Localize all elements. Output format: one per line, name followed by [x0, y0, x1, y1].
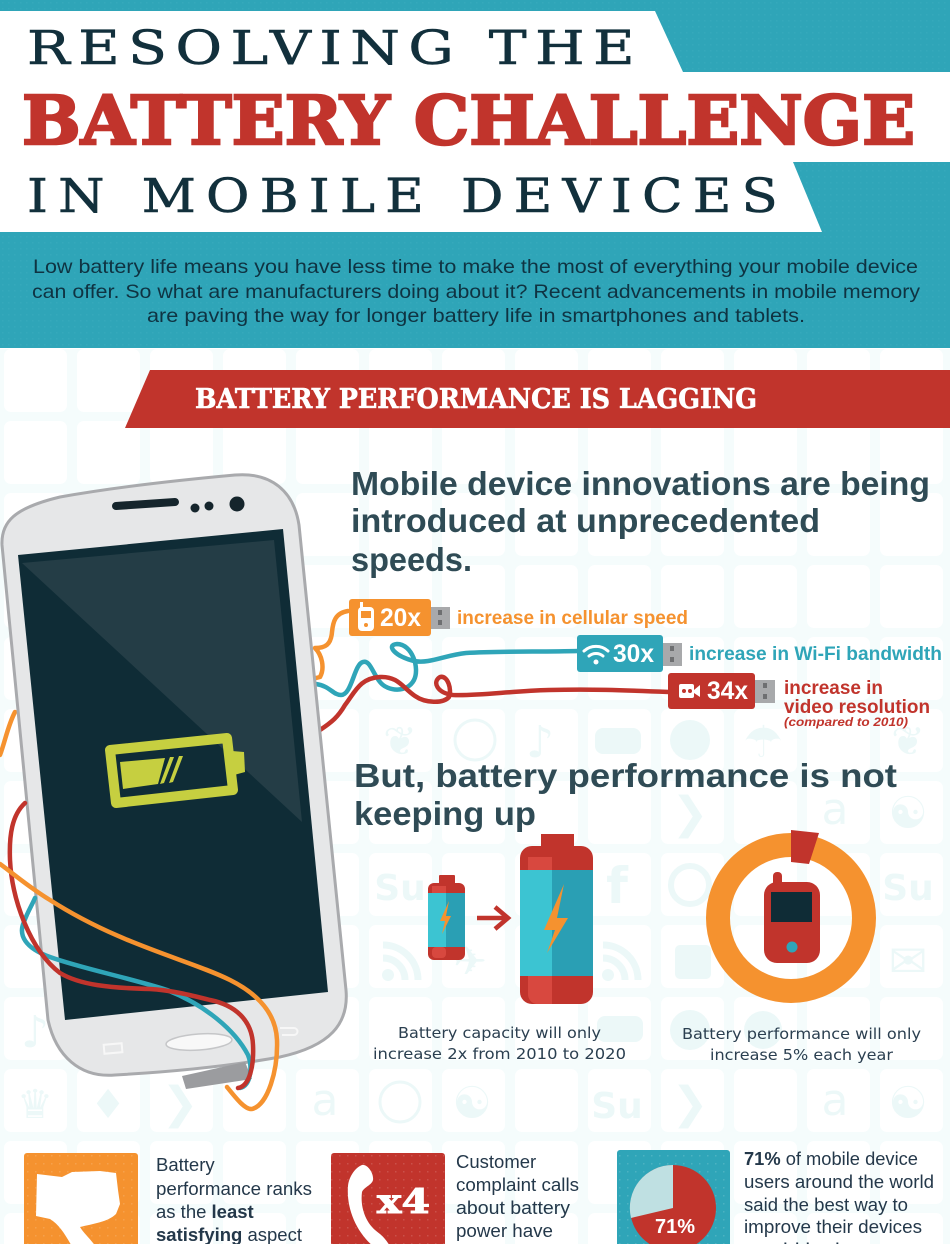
phone connector [182, 1062, 252, 1089]
infographic canvas: ❦ [383, 719, 417, 765]
headline: innovations: speeds. [351, 541, 472, 578]
text: users around the world [744, 1171, 934, 1192]
infographic canvas: ❯ [672, 788, 708, 839]
caption: capacity: increase 2x from 2010 to 2020 [373, 1045, 626, 1063]
text: power have [456, 1220, 553, 1241]
infographic canvas: ☯ [888, 788, 928, 839]
infographic canvas: f [606, 857, 629, 915]
infographic canvas: ♛ [17, 1082, 53, 1128]
headline: innovations: introduced at unprecedented [351, 502, 820, 539]
infographic canvas: ✈ [453, 939, 487, 985]
title line: battery challenge: BATTERY CHALLENGE [22, 81, 915, 160]
text: complaint calls [456, 1174, 579, 1195]
stat: video resolution: increase in [784, 678, 883, 699]
text [743, 1148, 934, 1244]
infographic canvas: ☯ [888, 1078, 928, 1129]
icon: phone handset [348, 1165, 392, 1244]
back key [280, 1028, 298, 1035]
stat: cellular speed: 20x [380, 604, 421, 632]
text: performance ranks [156, 1178, 312, 1199]
headline: innovations [351, 465, 930, 578]
section banner [125, 370, 950, 428]
stat: cellular speed [349, 599, 688, 636]
title line: resolving the: RESOLVING THE [27, 21, 643, 76]
arrow [477, 907, 508, 929]
caption: performance [682, 1025, 921, 1064]
infographic canvas: ✉ [889, 934, 927, 988]
fact: complaint calls: x4 [377, 1182, 430, 1222]
caption: capacity [373, 1024, 626, 1063]
infographic canvas: ☯ [452, 1078, 492, 1129]
infographic canvas: ❯ [162, 1078, 198, 1129]
infographic canvas: ♪ [21, 1007, 49, 1058]
stat: video resolution: video resolution [784, 697, 930, 718]
infographic canvas: Su [374, 868, 426, 909]
intro paragraph: are paving the way for longer battery life in smartphones and tablets. [147, 305, 805, 327]
title line: in mobile devices: IN MOBILE DEVICES [27, 169, 788, 224]
intro paragraph [32, 256, 920, 327]
stat: wi-fi bandwidth: 30x [613, 640, 654, 668]
fact: least satisfying [24, 1153, 312, 1244]
caption: performance: increase 5% each year [710, 1046, 894, 1064]
icon: video camera [679, 684, 700, 698]
headline: innovations: Mobile device innovations are being [351, 465, 930, 502]
stat: cellular speed: increase in cellular speed [457, 608, 688, 629]
section banner: BATTERY PERFORMANCE IS LAGGING [195, 384, 757, 415]
headline: battery not keeping up: keeping up [354, 795, 536, 832]
stat: video resolution: 34x [707, 677, 748, 705]
intro paragraph: can offer. So what are manufacturers doing about it? Recent advancements in mobile memory [32, 281, 920, 303]
infographic canvas: Su [591, 1086, 643, 1127]
infographic canvas: Su [882, 868, 934, 909]
stat: wi-fi bandwidth [577, 635, 942, 672]
icon: cell phone [358, 602, 374, 631]
text: about battery [456, 1197, 571, 1218]
stat: video resolution [668, 673, 930, 729]
infographic canvas: a [822, 784, 848, 835]
large battery [520, 834, 593, 1004]
icon: mobile phone [764, 872, 820, 963]
infographic canvas: a [822, 1075, 848, 1126]
wires behind phone, right side [312, 611, 669, 730]
text [156, 1154, 312, 1244]
fact: 71 percent [617, 1148, 934, 1244]
headline: battery not keeping up: But, battery performance is not [354, 757, 897, 794]
stat: wi-fi bandwidth: increase in Wi-Fi bandwidth [689, 644, 942, 665]
stat: video resolution: (compared to 2010) [784, 715, 908, 729]
icon: thumbs down [36, 1171, 120, 1244]
infographic canvas: a [312, 1075, 338, 1126]
infographic canvas: ♪ [526, 717, 554, 768]
pie chart: 71% [655, 1216, 695, 1238]
small battery [428, 875, 465, 960]
text: 71% of mobile device [744, 1148, 918, 1169]
text: Customer [456, 1151, 536, 1172]
infographic canvas: ❦ [891, 719, 925, 765]
speaker and camera [116, 496, 244, 512]
intro paragraph: Low battery life means you have less time to make the most of everything your mobile device [33, 256, 918, 278]
teal header background [0, 0, 950, 348]
title banner [0, 11, 950, 232]
phone screen [18, 529, 328, 1020]
headline: battery not keeping up [354, 757, 897, 832]
low battery icon [110, 738, 245, 803]
phone [2, 475, 346, 1089]
phone body [2, 475, 346, 1075]
text: Battery [156, 1154, 215, 1175]
infographic canvas: ♦ [90, 1082, 126, 1128]
text: as the least [156, 1201, 254, 1222]
home button [166, 1032, 232, 1052]
pie chart [630, 1165, 716, 1244]
caption: capacity: Battery capacity will only [398, 1024, 601, 1042]
donut chart with phone [718, 830, 864, 991]
infographic canvas: ❯ [672, 1078, 708, 1129]
wire left of phone [0, 712, 15, 755]
icon: wifi [584, 646, 608, 656]
text: improve their devices [744, 1216, 922, 1237]
text: said the best way to [744, 1194, 908, 1215]
caption: performance: Battery performance will only [682, 1025, 921, 1043]
menu key [104, 1043, 122, 1054]
wires over phone [0, 803, 277, 1109]
text [456, 1151, 579, 1241]
fact: complaint calls [331, 1151, 579, 1244]
infographic canvas: ☂ [743, 717, 783, 768]
